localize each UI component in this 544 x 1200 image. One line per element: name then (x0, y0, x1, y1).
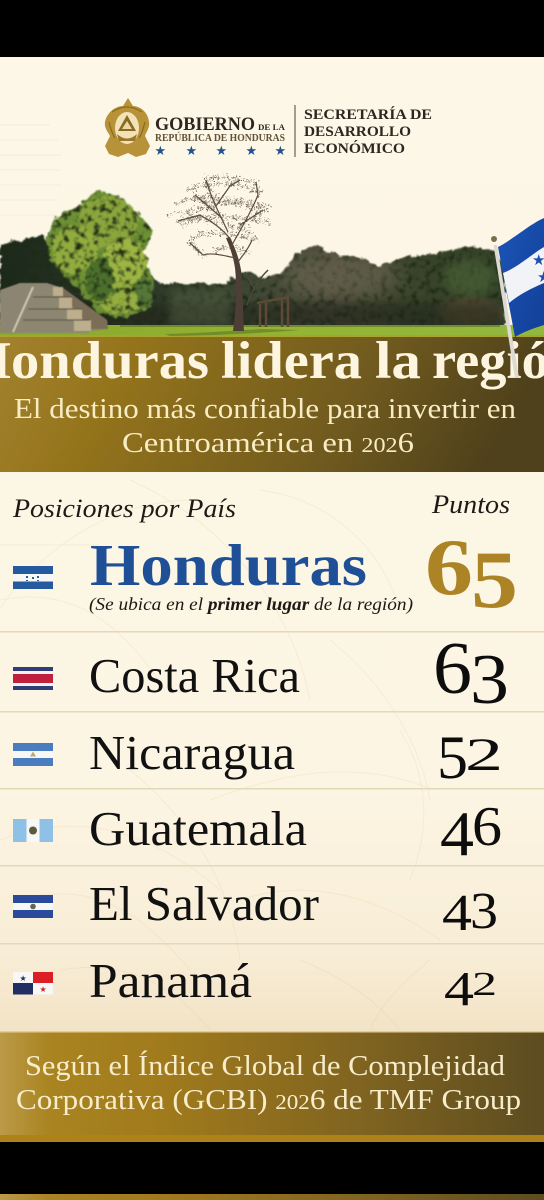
country name: Guatemala (89, 801, 307, 856)
title (0, 332, 544, 390)
row: Nicaragua (13, 725, 503, 792)
five blue stars: ★ (246, 143, 257, 158)
five blue stars: ★ (154, 143, 166, 158)
subtitle: Centroamérica en 2026 (122, 427, 414, 459)
country name: Panamá (89, 953, 252, 1008)
score: 4 (444, 961, 474, 1016)
column heading: positions by country: Posiciones por País (12, 494, 236, 523)
row: El Salvador (13, 876, 498, 942)
row: Panamá (13, 953, 497, 1016)
secretariat name (304, 106, 432, 157)
icon: Honduran flag on pole (491, 218, 544, 378)
forest shading (0, 251, 502, 329)
landscape photo illustration (0, 177, 544, 337)
secretariat name: DESARROLLO (304, 124, 411, 140)
score: 2 (472, 966, 497, 1003)
grass (0, 325, 544, 335)
header logos (105, 98, 432, 158)
icon: flag of Panama: ★ (20, 974, 27, 983)
bottom gold sliver (0, 1194, 544, 1200)
score: 5 (437, 725, 468, 792)
score: 4 (440, 798, 474, 869)
secretariat name: SECRETARÍA DE (304, 106, 432, 123)
five blue stars: ★ (274, 143, 286, 158)
icon: flag of Panama: ★ (40, 985, 47, 994)
country name: Costa Rica (89, 648, 300, 703)
country name: Honduras (90, 532, 367, 598)
row: Guatemala (13, 796, 502, 869)
title: la (375, 332, 421, 390)
row: Honduras (13, 524, 518, 625)
black bottom bar (0, 1142, 544, 1194)
score: 4 (442, 885, 472, 942)
footer gold band (0, 1032, 544, 1135)
icon: flag of El Salvador (13, 895, 53, 918)
icon: coat of arms emblem (105, 98, 150, 157)
government name: GOBIERNO (155, 115, 255, 135)
stone pyramid (0, 283, 108, 333)
top gold banner (0, 337, 544, 472)
footer source text (16, 1049, 521, 1116)
footer source text: Corporativa (GCBI) 2026 de TMF Group (16, 1084, 521, 1116)
country name: Nicaragua (89, 725, 295, 780)
icon: flag of Nicaragua (13, 743, 53, 766)
column heading: points: Puntos (431, 490, 510, 519)
government name (155, 115, 285, 144)
government name: REPÚBLICA DE HONDURAS (155, 132, 285, 144)
tall bare tree (170, 177, 270, 331)
green tree (47, 190, 155, 318)
row dividers (0, 631, 544, 944)
icon: flag of Costa Rica (13, 667, 53, 690)
score: 5 (471, 534, 518, 625)
subtitle (14, 393, 517, 459)
black top bar (0, 0, 544, 57)
row: Costa Rica (13, 628, 509, 719)
score: 6 (433, 628, 472, 710)
small branches behind structure (245, 270, 275, 305)
secretariat name: ECONÓMICO (304, 140, 405, 157)
footer source text: Según el Índice Global de Complejidad (25, 1049, 506, 1082)
score: 6 (472, 796, 502, 858)
icon: flag of Guatemala (13, 819, 53, 842)
wooden structure (257, 297, 289, 327)
background watermark pattern (0, 125, 440, 1030)
five blue stars: ★ (216, 143, 227, 158)
title: lidera (221, 332, 362, 390)
country name: El Salvador (89, 876, 319, 931)
five blue stars (154, 143, 286, 158)
five blue stars: ★ (186, 143, 197, 158)
subtitle: El destino más confiable para invertir en (14, 393, 517, 425)
distant forest (0, 235, 505, 330)
score: 2 (465, 729, 503, 781)
icon: flag of Honduras (13, 566, 53, 589)
score: 3 (470, 883, 498, 940)
score: 6 (425, 524, 473, 612)
icon: flag of Panama (13, 972, 53, 994)
score: 3 (470, 641, 509, 719)
note: (Se ubica en el primer lugar de la región) (89, 594, 413, 614)
government name: DE LA (258, 123, 285, 132)
